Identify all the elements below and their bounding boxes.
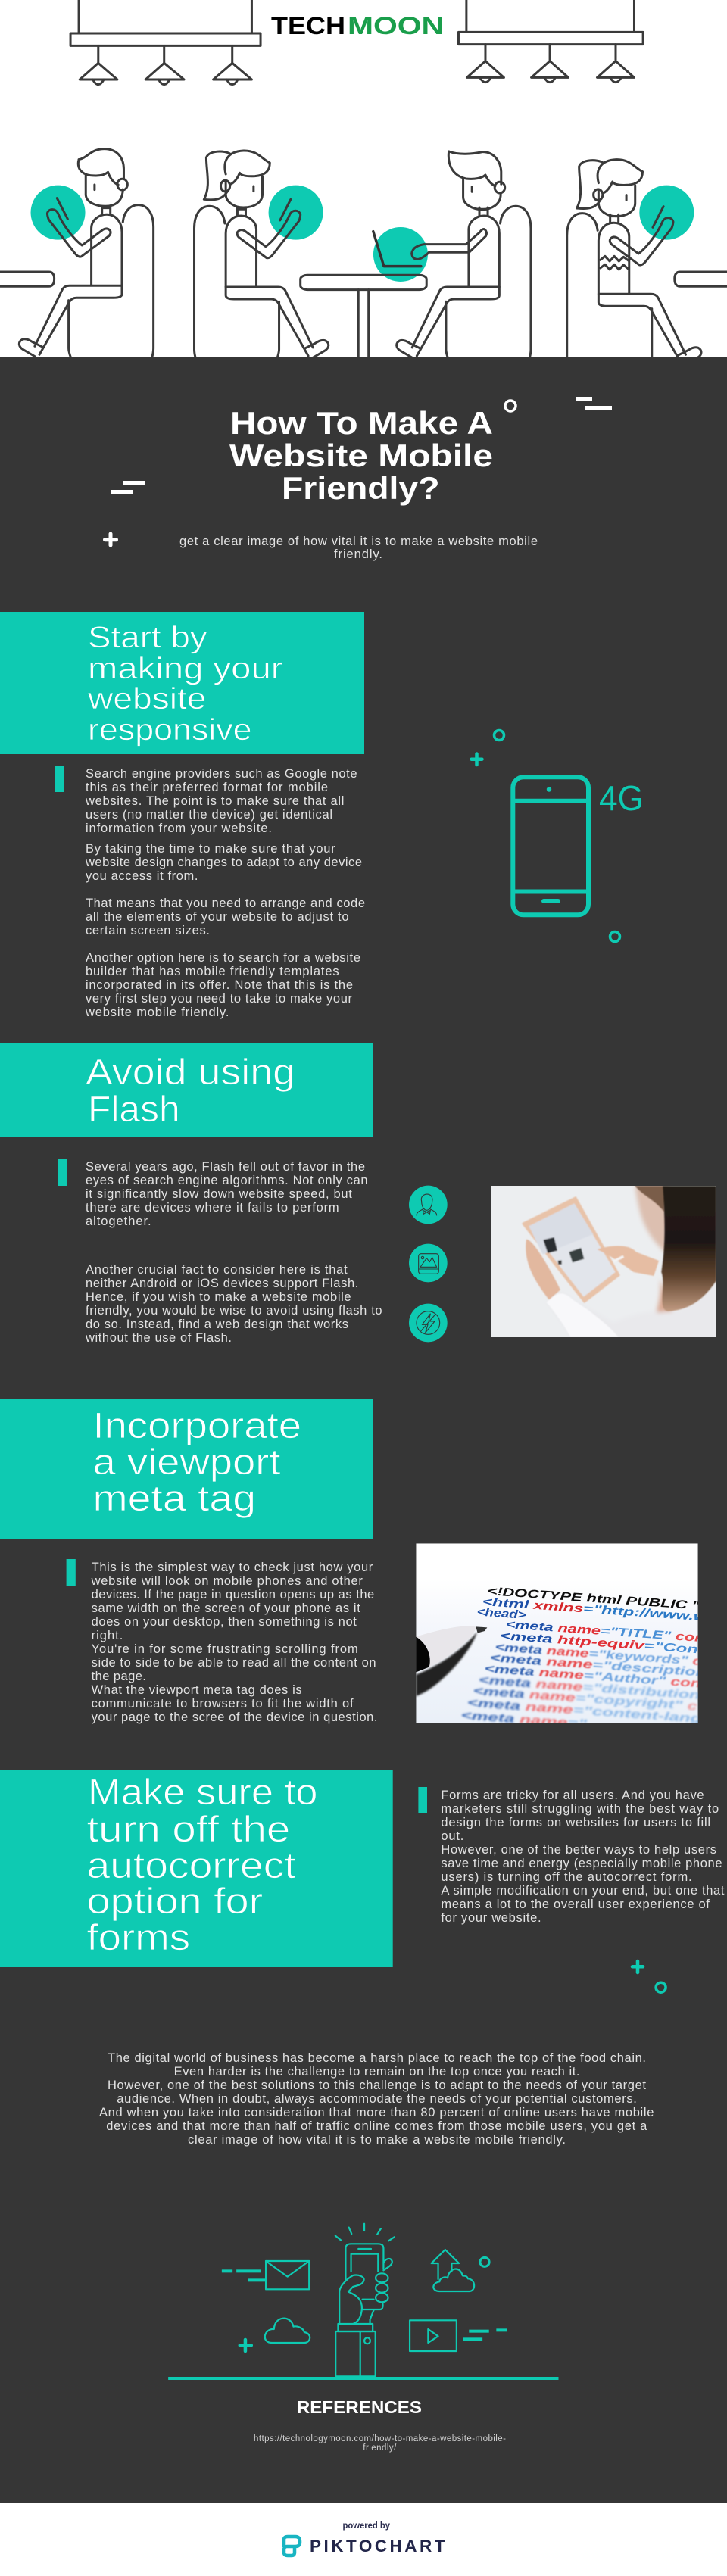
text block: section 1: [85, 767, 365, 1019]
text block: conclusion: However, one of the best solutions to this challenge is to adapt to the needs of your target: [108, 2079, 646, 2092]
references link: https://technologymoon.com/how-to-make-a-website-mobile-: [254, 2434, 506, 2443]
centre table and laptop: [301, 232, 426, 357]
text block: section 1: all the elements of your website to adjust to: [86, 910, 348, 924]
photo: code listing with pen: <meta name ="description: [489, 1651, 707, 1679]
photo: code listing with pen: <meta name ="TITLE" con: [505, 1618, 705, 1645]
icon: smartphone with 4G: 4G: [599, 778, 644, 818]
teal decorations around smartphone: [471, 730, 619, 942]
heading: incorporate a viewport meta tag: meta tag: [92, 1479, 256, 1519]
person 1 with phone: [19, 149, 154, 366]
text block: section 2: it significantly slow down website speed, but: [86, 1187, 352, 1201]
text block: section 3: the page.: [92, 1670, 146, 1683]
photo: code listing with pen: <meta http-equiv ="Cont: [500, 1629, 706, 1657]
heading: start by making your website responsive: [87, 621, 283, 747]
text block: section 2: eyes of search engine algorithms. Not only can: [86, 1174, 368, 1187]
text block: section 1: this as their preferred format for mobile: [86, 781, 328, 794]
white header background: [0, 0, 727, 357]
text block: conclusion: devices and that more than half of traffic online comes from those mobile users, you get a: [106, 2119, 647, 2133]
heading: start by making your website responsive: making your: [88, 652, 283, 685]
references link: [254, 2434, 506, 2453]
heading: avoid using flash: Avoid using: [86, 1053, 295, 1093]
photo: code listing with pen: <meta name ="keywords" c: [495, 1641, 703, 1668]
title: How To Make A: [230, 405, 493, 441]
text block: section 1: certain screen sizes.: [86, 924, 210, 937]
panel: section 1 banner: [0, 612, 364, 754]
text block: section 1: information from your website.: [86, 822, 272, 835]
heading: start by making your website responsive: responsive: [88, 713, 251, 747]
text block: section 3: devices. If the page in question opens up as the: [92, 1588, 374, 1601]
heading: incorporate a viewport meta tag: [92, 1406, 301, 1519]
text block: section 2: without the use of Flash.: [85, 1331, 232, 1345]
heading: make sure to turn off the autocorrect option for forms: option for: [86, 1882, 263, 1922]
text block: section 3: This is the simplest way to check just how your: [92, 1561, 373, 1574]
white decorations around the title: [105, 397, 612, 545]
photo: code listing with pen: <meta name ="copyright" c: [473, 1685, 698, 1713]
text block: section 1: websites. The point is to make sure that all: [85, 794, 344, 808]
panel: section 2 banner: [0, 1043, 373, 1137]
text block: section 1: Search engine providers such as Google note: [86, 767, 357, 781]
photo: woman using tablet: [491, 1186, 716, 1340]
text block: section 2: Another crucial fact to consider here is that: [86, 1263, 348, 1277]
header illustration: lamps and people sitting: [0, 0, 727, 374]
heading: make sure to turn off the autocorrect option for forms: forms: [86, 1918, 190, 1958]
text block: section 4: means a lot to the overall user experience of: [441, 1898, 710, 1911]
text block: section 2: neither Android or iOS devices support Flash.: [86, 1277, 358, 1290]
heading: references: REFERENCES: [297, 2397, 422, 2417]
ground line: [168, 2377, 558, 2380]
text block: section 2: Several years ago, Flash fell out of favor in the: [86, 1160, 365, 1174]
text block: section 4: design the forms on websites for users to fill: [441, 1816, 710, 1829]
photo: code listing with pen: <head>: [476, 1605, 526, 1622]
photo: code listing with pen: [416, 1543, 698, 1723]
text block: section 3: You're in for some frustrating scrolling from: [92, 1642, 358, 1656]
text block: section 1: you access it from.: [86, 869, 198, 883]
title: [229, 405, 493, 506]
text block: section 2: Hence, if you wish to make a website mobile: [86, 1290, 351, 1304]
heading: make sure to turn off the autocorrect option for forms: autocorrect: [86, 1846, 296, 1886]
teal decorations below section 4: [632, 1961, 666, 1992]
photo: code listing with pen: <html xmlns ="http://www.w3: [482, 1595, 718, 1625]
person 3 with laptop: [397, 151, 531, 367]
footer: powered by piktochart: [0, 2503, 727, 2576]
icon: hanging lamps right: [458, 0, 643, 83]
icons column: person, picture, lightning: [409, 1186, 448, 1342]
text block: section 4: out.: [441, 1829, 463, 1843]
text block: section 2: altogether.: [86, 1215, 151, 1228]
text block: section 1: users (no matter the device) get identical: [86, 808, 332, 822]
photo: code listing with pen: <meta name ="Author" con: [484, 1662, 701, 1690]
icon: upload cloud: [432, 2250, 489, 2291]
logo: TECHMOON: TECH: [271, 12, 345, 39]
subtitle: friendly.: [334, 547, 382, 561]
heading: avoid using flash: [86, 1053, 295, 1130]
person 4 with phone and sweater: [567, 160, 701, 374]
subtitle: [179, 535, 538, 561]
text block: section 4: Forms are tricky for all users. And you have: [441, 1789, 704, 1802]
footer: powered by piktochart: powered by: [342, 2520, 390, 2531]
text block: section 4: However, one of the better ways to help users: [441, 1843, 716, 1857]
text block: section 1: incorporated in its offer. Note that this is the: [86, 978, 353, 992]
text block: section 1: By taking the time to make sure that your: [86, 842, 335, 856]
text block: section 1: Another option here is to search for a website: [86, 951, 360, 965]
text block: section 4: users) is turning off the autocorrect form.: [441, 1870, 692, 1884]
photo: code listing with pen: <meta name ="distribution: [478, 1673, 700, 1702]
text block: section 2: there are devices where it fails to perform: [86, 1201, 339, 1215]
text block: conclusion: And when you take into consideration that more than 80 percent of online users have mobile: [99, 2106, 654, 2119]
heading: make sure to turn off the autocorrect option for forms: [86, 1773, 318, 1958]
icon: piktochart logo: [284, 2537, 300, 2556]
icon: person: [409, 1186, 448, 1224]
icon: plus: [240, 2340, 251, 2351]
text block: section 4: A simple modification on your end, but one that: [441, 1884, 725, 1898]
text block: section 4: marketers still struggling with the best way to: [441, 1802, 719, 1816]
text block: section 2: do so. Instead, find a web design that works: [86, 1318, 348, 1331]
text block: section 1: That means that you need to arrange and code: [86, 897, 365, 910]
icon: smartphone with 4G: [513, 777, 644, 915]
text block: section 4: save time and energy (especially mobile phone: [441, 1857, 722, 1870]
photo: code listing with pen: <!DOCTYPE html PUBLIC "-//: [487, 1585, 716, 1614]
text block: section 3: your page to the scree of the device in question.: [92, 1711, 377, 1724]
text block: section 3: What the viewport meta tag does is: [92, 1683, 302, 1697]
text block: section 1: builder that has mobile friendly templates: [86, 965, 339, 978]
icon: picture: [409, 1244, 448, 1282]
heading: incorporate a viewport meta tag: Incorporate: [92, 1406, 301, 1446]
heading: make sure to turn off the autocorrect option for forms: Make sure to: [88, 1773, 318, 1813]
text block: section 3: [91, 1561, 377, 1724]
text block: section 3: same width on the screen of your phone as it: [92, 1601, 360, 1615]
accent bar section 1: [55, 766, 64, 792]
text block: section 1: very first step you need to take to make your: [86, 992, 353, 1006]
panel: section 4 banner: [0, 1770, 393, 1967]
title: Website Mobile: [229, 438, 493, 473]
side tables: [0, 272, 727, 286]
subtitle: get a clear image of how vital it is to make a website mobile: [179, 535, 538, 548]
text block: section 3: right.: [92, 1629, 123, 1642]
accent bar section 3: [67, 1559, 76, 1586]
footer: powered by piktochart: PIKTOCHART: [310, 2537, 445, 2556]
text block: section 4: for your website.: [441, 1911, 541, 1925]
photo: code listing with pen: <meta name =": [460, 1709, 588, 1731]
icon: video player: [410, 2320, 507, 2351]
text block: section 3: side to side to be able to read all the content on: [92, 1656, 376, 1670]
text block: section 3: does on your desktop, then something is not: [92, 1615, 357, 1629]
text block: section 2: friendly, you would be wise to avoid using flash to: [86, 1304, 382, 1318]
heading: incorporate a viewport meta tag: a viewport: [92, 1442, 280, 1483]
heading: start by making your website responsive: Start by: [88, 621, 207, 654]
text block: conclusion: Even harder is the challenge to remain on the top once you reach it.: [174, 2065, 580, 2079]
photo: code listing with pen: <meta name ="content-lang: [466, 1696, 703, 1726]
icon: lightning: [409, 1304, 448, 1342]
text block: section 4: [441, 1789, 725, 1925]
title: Friendly?: [282, 470, 439, 506]
icon: hanging lamps left: [70, 0, 261, 85]
logo: TECHMOON: [271, 12, 444, 39]
logo: TECHMOON: MOON: [348, 12, 444, 39]
text block: section 1: website design changes to adapt to any device: [85, 856, 362, 869]
icon: envelope: [222, 2261, 309, 2289]
heading: avoid using flash: Flash: [88, 1090, 180, 1130]
text block: section 2: [85, 1160, 382, 1345]
icon: cloud: [265, 2319, 310, 2343]
person 2 with phone: [195, 151, 329, 367]
teal circles behind devices: [31, 186, 694, 282]
accent bar section 4: [418, 1787, 427, 1813]
text block: conclusion: clear image of how vital it is to make a website mobile friendly.: [188, 2133, 566, 2147]
text block: conclusion: audience. When in doubt, always accommodate the needs of your potential customers.: [117, 2092, 637, 2106]
heading: make sure to turn off the autocorrect option for forms: turn off the: [86, 1810, 290, 1850]
text block: section 3: communicate to browsers to fit the width of: [92, 1697, 354, 1711]
accent bar section 2: [58, 1159, 67, 1186]
illustration: hand holding phone with media icons: [168, 2224, 558, 2380]
text block: conclusion: [99, 2051, 654, 2147]
text block: conclusion: The digital world of business has become a harsh place to reach the top of the food chain.: [108, 2051, 646, 2065]
icon: hand with phone: [335, 2224, 395, 2376]
heading: start by making your website responsive: website: [87, 682, 206, 716]
text block: section 1: website mobile friendly.: [85, 1006, 229, 1019]
text block: section 3: website will look on mobile phones and other: [91, 1574, 363, 1588]
panel: section 3 banner: [0, 1399, 373, 1539]
references link: friendly/: [363, 2443, 397, 2453]
